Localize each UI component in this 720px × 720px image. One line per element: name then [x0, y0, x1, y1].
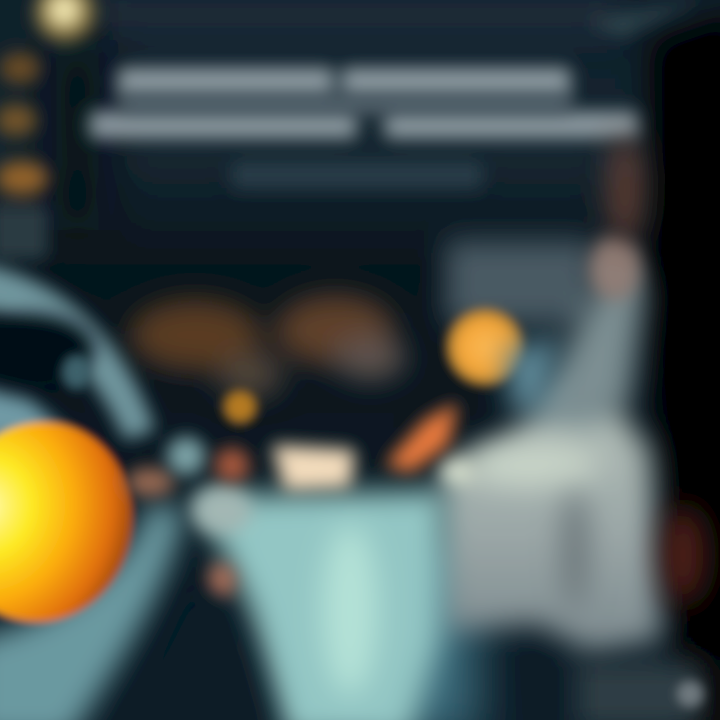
- left column of amber lights: [0, 53, 48, 260]
- orange link near fire: [126, 468, 174, 496]
- central pale teal panel: [192, 486, 445, 720]
- small orange marker: [208, 563, 236, 597]
- dark left band: [55, 40, 100, 230]
- dark bottom wedge: [125, 590, 275, 720]
- orange flame: [385, 402, 458, 472]
- top glowing orb: [35, 0, 95, 42]
- top right light streak: [590, 0, 700, 36]
- left teal sweep: [0, 500, 185, 720]
- heading placeholder bars: first line: [118, 68, 570, 96]
- red-brown glow at right edge: [662, 507, 706, 603]
- heading placeholder bars: second line: [90, 112, 637, 138]
- orange blurred cluster: [129, 294, 406, 399]
- large fire orb: [0, 408, 148, 636]
- heading middle connecting haze: [120, 94, 570, 114]
- amber circle: [447, 309, 523, 385]
- small amber orb: [224, 391, 256, 423]
- dark right column: [650, 10, 720, 720]
- cream glow: [215, 445, 355, 490]
- bottom right grey patch: [575, 660, 705, 720]
- subheading placeholder bar: [232, 162, 482, 188]
- left curved helmet shape: [0, 262, 155, 440]
- white garment figure: [440, 135, 662, 655]
- small teal orb: [167, 437, 205, 475]
